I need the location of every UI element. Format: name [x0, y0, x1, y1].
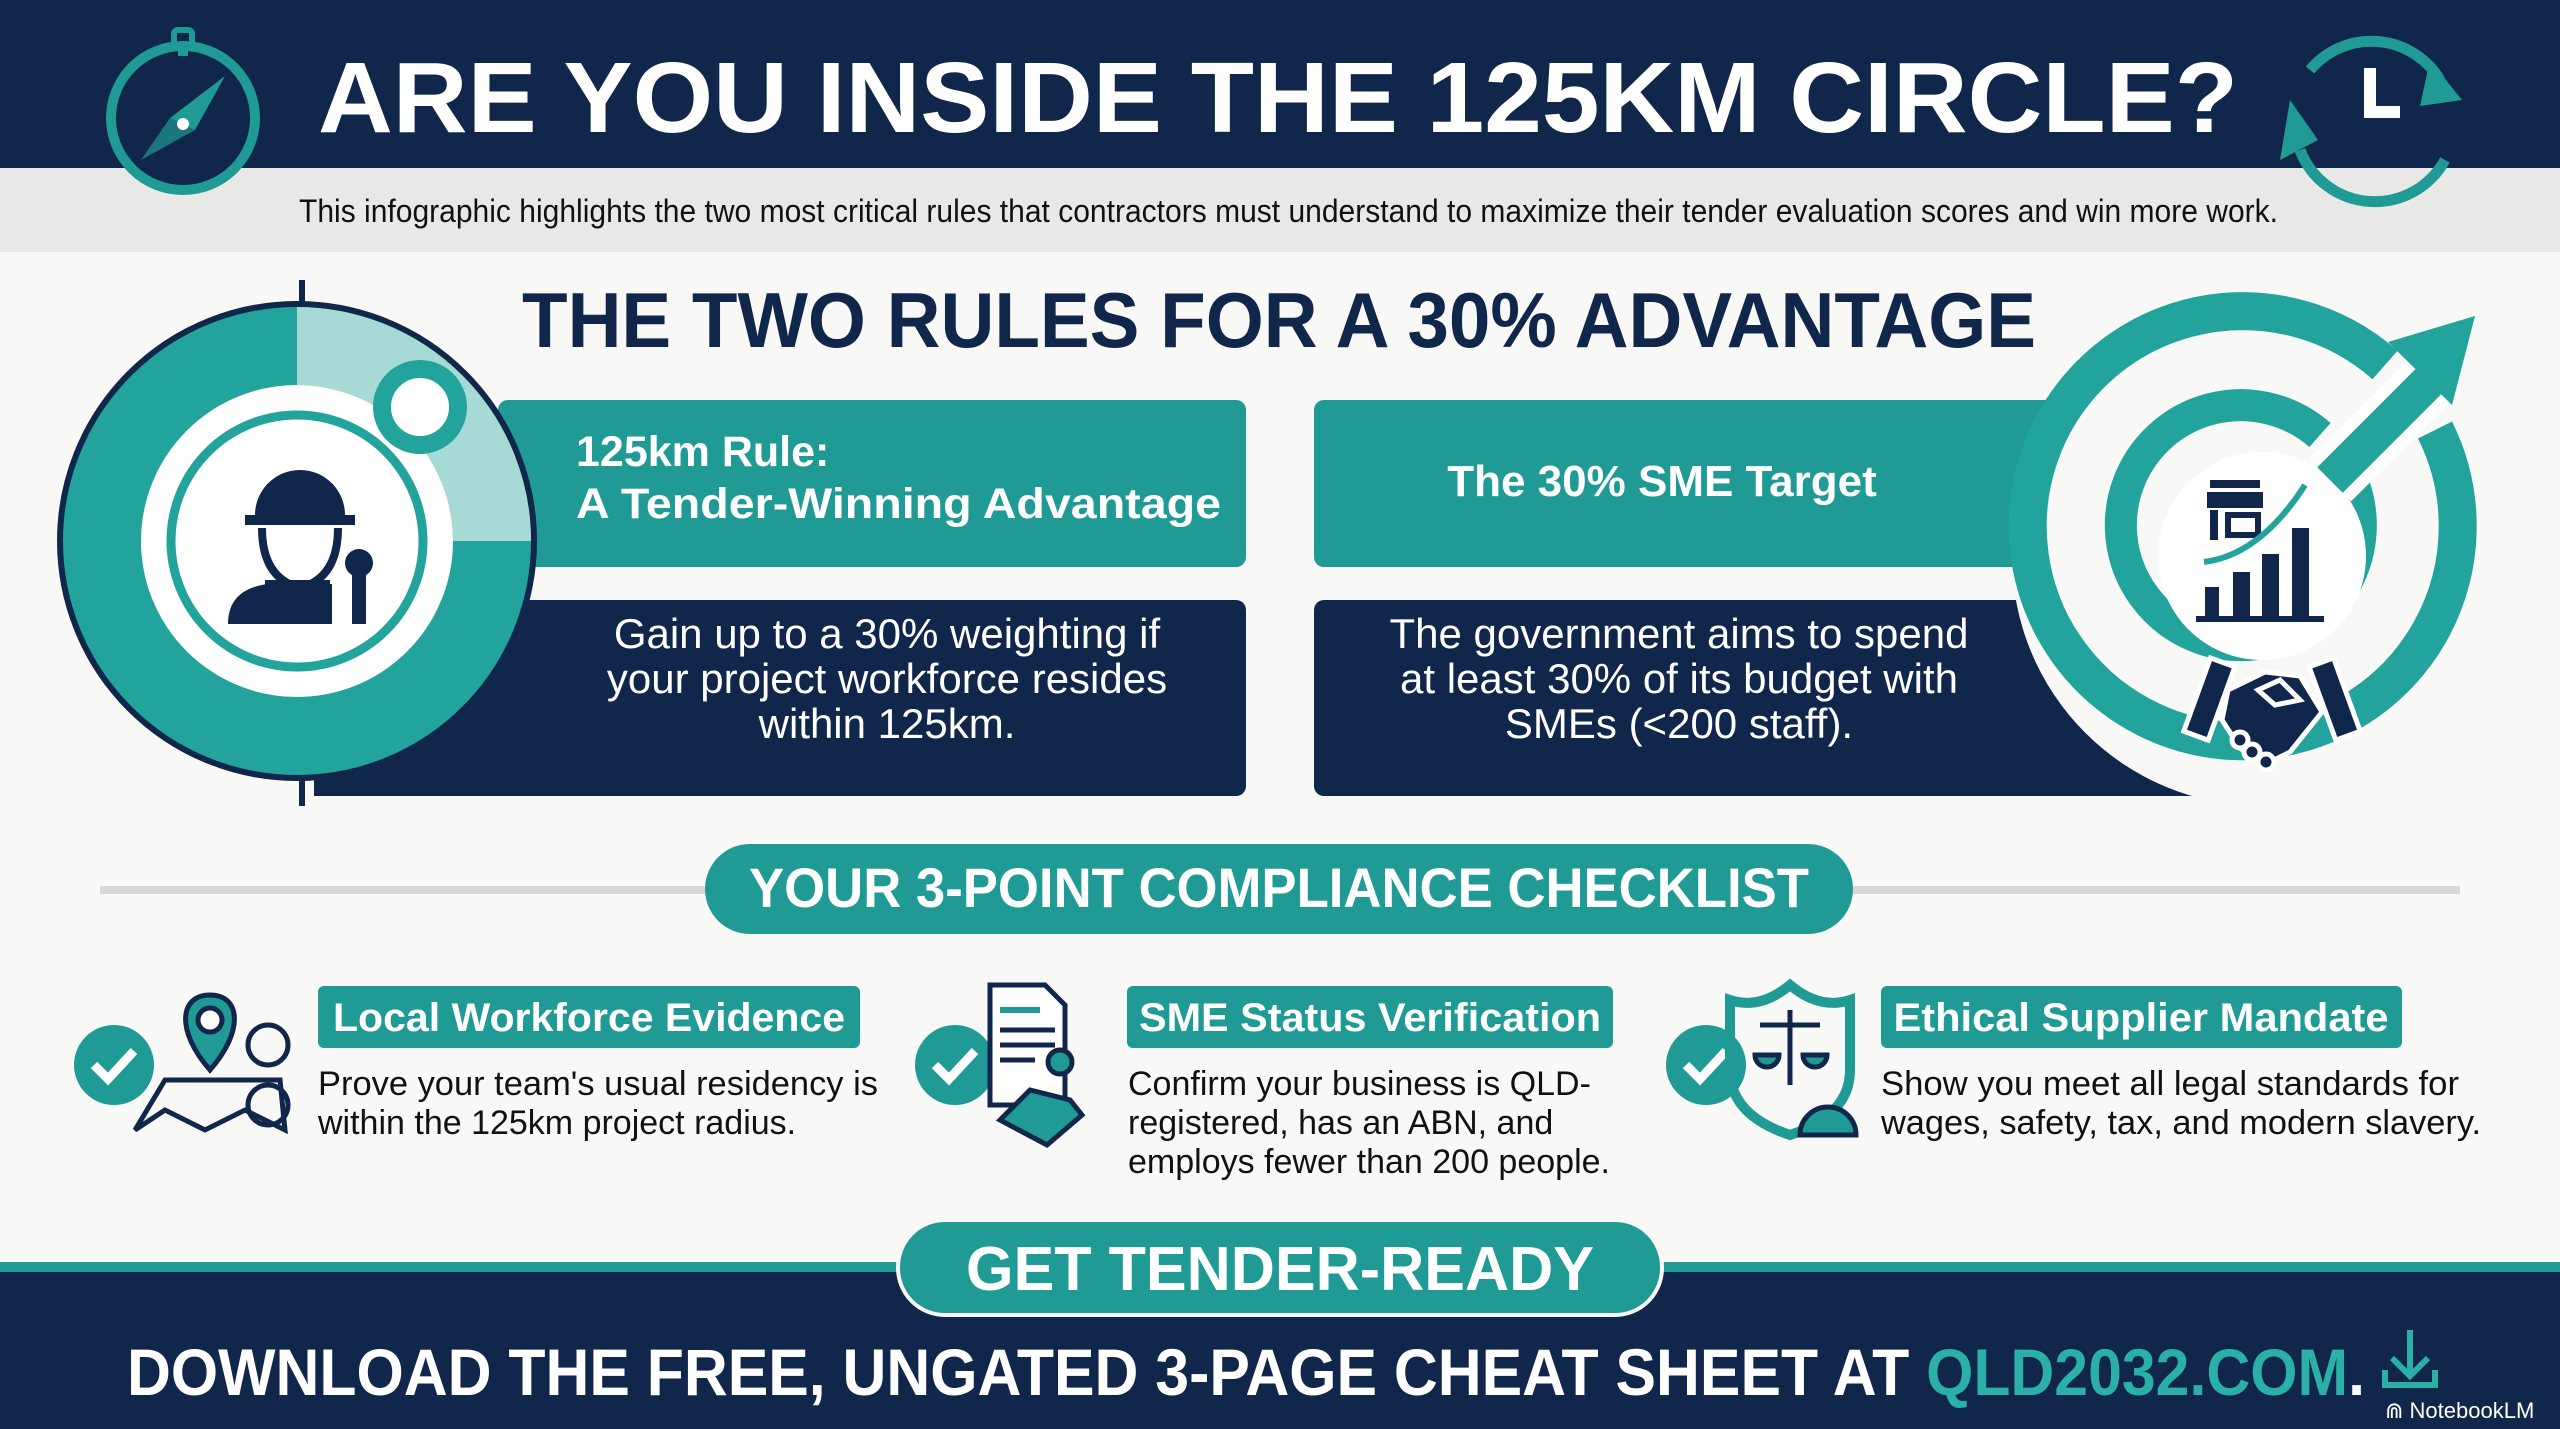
rule 2 description box: SMEs (<200 staff).	[1505, 700, 1853, 747]
label: SME status	[1127, 986, 1613, 1048]
heading: two rules: THE TWO RULES FOR A 30% ADVANTAGE	[522, 276, 2036, 364]
rule 2 description box: The government aims to spend	[1390, 610, 1968, 657]
rule 2 description box: at least 30% of its budget with	[1400, 655, 1958, 702]
subtitle: This infographic highlights the two most critical rules that contractors must understand to maximize their tender evaluation scores and win more work.	[299, 193, 2278, 229]
footer text: DOWNLOAD THE FREE, UNGATED 3-PAGE CHEAT SHEET AT QLD2032.COM.	[127, 1335, 2365, 1409]
icon: clock refresh	[2280, 41, 2462, 202]
icon: shield scales	[1730, 985, 1856, 1135]
watermark: ⋒ NotebookLM	[2385, 1398, 2534, 1423]
CTA pill: GET TENDER-READY	[966, 1235, 1594, 1304]
icon: handshake	[2184, 658, 2360, 770]
icon: check 1	[74, 1025, 154, 1105]
text: SME status: Confirm your business is QLD-	[1128, 1065, 1591, 1103]
text: ethical supplier: wages, safety, tax, and modern slavery.	[1880, 1104, 2481, 1142]
footer band	[0, 1262, 2560, 1429]
icon: check 3	[1666, 1025, 1746, 1105]
text: SME status	[1128, 1065, 1610, 1181]
checklist item: SME status	[915, 985, 1613, 1181]
icon: document handshake	[990, 985, 1082, 1145]
icon: check 2	[915, 1025, 995, 1105]
heading: checklist pill	[100, 844, 2460, 934]
icon: compass stopwatch	[111, 30, 255, 190]
icon: worker target ring	[61, 280, 533, 806]
rule 1 title box	[498, 400, 1246, 567]
heading: checklist pill: YOUR 3-POINT COMPLIANCE CHECKLIST	[749, 856, 1809, 919]
CTA pill	[898, 1220, 1662, 1315]
text: ethical supplier	[1880, 1065, 2481, 1142]
label: ethical supplier: Ethical Supplier Mandate	[1894, 996, 2388, 1040]
label: SME status: SME Status Verification	[1139, 996, 1601, 1040]
panel: rule 1	[314, 400, 1246, 796]
rule 2 description box	[1314, 600, 2257, 796]
label: ethical supplier	[1881, 986, 2402, 1048]
text: local workforce: Prove your team's usual residency is	[318, 1065, 878, 1103]
text: local workforce: within the 125km project radius.	[317, 1104, 796, 1142]
checklist item: ethical supplier	[1666, 985, 2481, 1142]
panel: rule 2	[1314, 400, 2257, 796]
icon: SME growth ring	[2012, 306, 2512, 806]
rule 1 description box: your project workforce resides	[607, 655, 1167, 702]
checklist item: local workforce	[74, 986, 878, 1142]
title: ARE YOU INSIDE THE 125KM CIRCLE?	[318, 42, 2238, 154]
text: ethical supplier: Show you meet all legal standards for	[1881, 1065, 2459, 1103]
text: SME status: registered, has an ABN, and	[1128, 1104, 1553, 1142]
rule 1 title box: 125km Rule:	[576, 428, 829, 476]
rule 1 title box: A Tender-Winning Advantage	[576, 480, 1221, 528]
rule 1 description box	[314, 600, 1246, 796]
text: local workforce	[317, 1065, 878, 1142]
label: local workforce: Local Workforce Evidence	[333, 996, 845, 1040]
icon: map pin people	[135, 995, 288, 1130]
rule 1 description box: Gain up to a 30% weighting if	[614, 610, 1160, 657]
header band	[0, 0, 2560, 252]
text: SME status: employs fewer than 200 people.	[1128, 1143, 1610, 1181]
label: local workforce	[318, 986, 860, 1048]
rule 1 description box: within 125km.	[758, 700, 1015, 747]
rule 2 title box: The 30% SME Target	[1447, 457, 1877, 506]
rule 2 title box	[1314, 400, 2071, 567]
icon: download	[2385, 1330, 2435, 1385]
